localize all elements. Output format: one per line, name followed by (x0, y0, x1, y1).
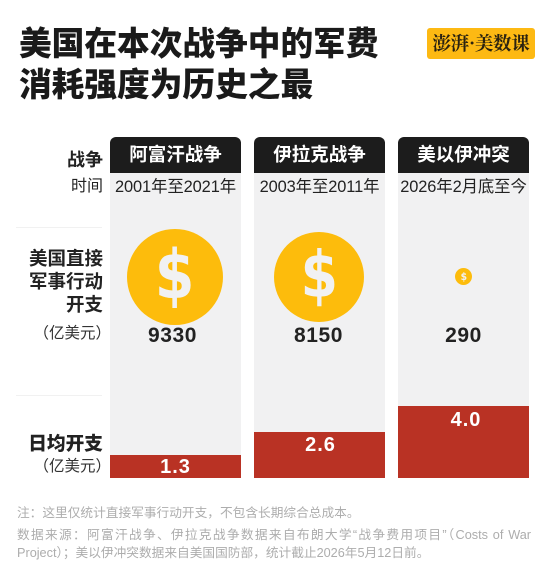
row label: period: 时间 (71, 178, 103, 195)
bar 1.3 (110, 455, 241, 478)
logo: The Paper data class: 澎湃·美数课 (433, 30, 529, 56)
Iran header: 美以伊冲突 (417, 144, 510, 165)
value 9330: 9330 (148, 324, 197, 347)
title: 消耗强度为历史之最 (19, 66, 313, 103)
icon: coin 290: $ (460, 270, 467, 283)
title (19, 25, 379, 103)
Afghanistan header (110, 137, 241, 173)
panel: Afghanistan War (110, 137, 241, 478)
Iran period: 2026年2月底至今 (400, 178, 527, 196)
panel: Iraq War (254, 137, 385, 478)
icon: coin 290 (455, 268, 472, 285)
row label: daily spending: 日均开支 (28, 433, 103, 454)
bar 4.0: 4.0 (451, 409, 481, 431)
Iran header (398, 137, 529, 173)
Iraq period: 2003年至2011年 (260, 178, 379, 196)
Iraq header (254, 137, 385, 173)
row label: war: 战争 (67, 150, 103, 170)
icon: coin 9330: $ (155, 236, 195, 315)
row unit: direct spending: （亿美元） (33, 325, 111, 342)
icon: coin 8150 (274, 232, 364, 322)
Afghanistan header: 阿富汗战争 (129, 144, 222, 165)
row label: direct military spending (29, 248, 103, 315)
title: 美国在本次战争中的军费 (19, 25, 379, 62)
value 290: 290 (445, 324, 482, 347)
note: 注：这里仅统计直接军事行动开支，不包含长期综合总成本。 (17, 506, 360, 520)
data source (17, 528, 531, 560)
row label: direct military spending: 美国直接 (29, 248, 103, 269)
Iraq header: 伊拉克战争 (273, 144, 366, 165)
data source: Project）；美以伊冲突数据来自美国国防部，统计截止2026年5月12日前。 (17, 546, 429, 560)
bar 2.6: 2.6 (305, 434, 336, 456)
bar 1.3: 1.3 (160, 456, 191, 478)
value 8150: 8150 (294, 324, 343, 347)
row unit: daily spending: （亿美元） (33, 458, 111, 475)
bar 4.0 (398, 406, 529, 478)
row label: direct military spending: 开支 (66, 294, 103, 315)
icon: coin 9330 (127, 229, 223, 325)
Afghanistan period: 2001年至2021年 (115, 178, 236, 196)
data source: 数据来源：阿富汗战争、伊拉克战争数据来自布朗大学“战争费用项目”（Costs of War (17, 528, 531, 542)
bar 2.6 (256, 432, 385, 478)
icon: coin 8150: $ (300, 239, 338, 313)
row label: direct military spending: 军事行动 (29, 271, 103, 292)
panel: US-Israel-Iran conflict (398, 137, 529, 478)
